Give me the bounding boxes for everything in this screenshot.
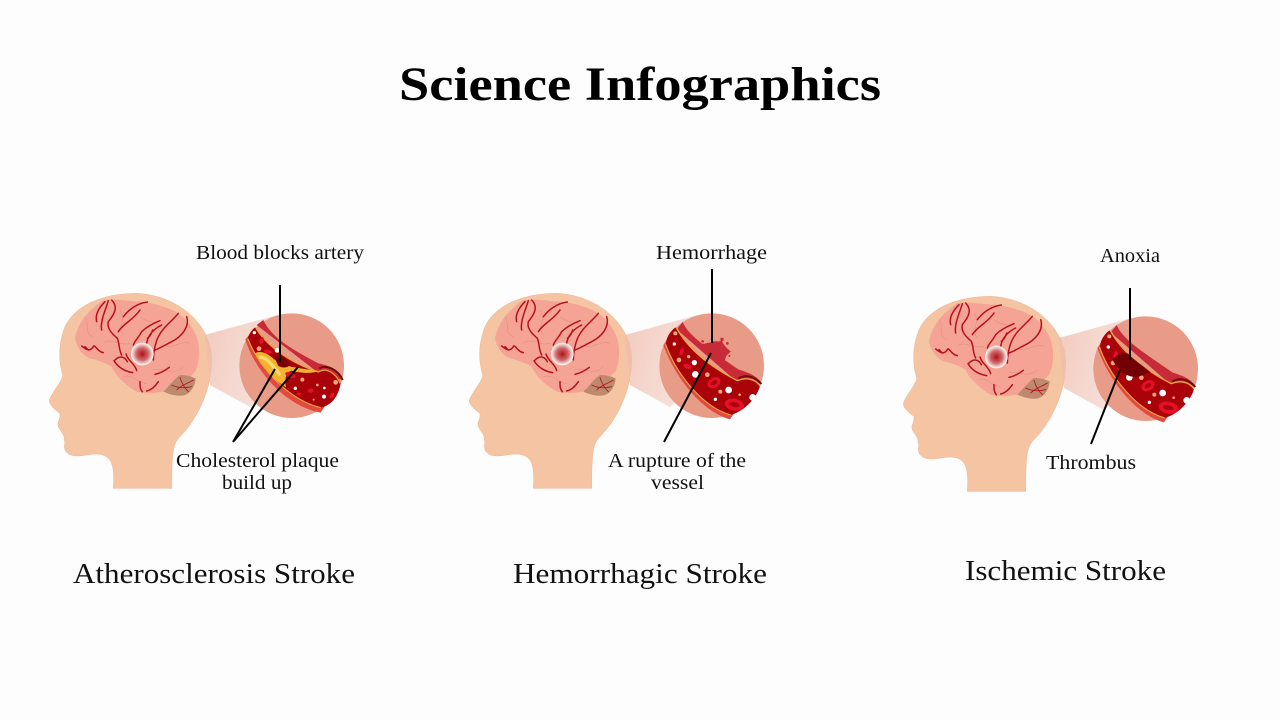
label: a rupture of the vessel: vessel (651, 472, 704, 494)
magnified circle (239, 313, 344, 418)
icon: ruptured vessel (663, 322, 761, 419)
icon: artery with plaque (245, 320, 343, 413)
title: Science Infographics (399, 58, 881, 111)
heading: ischemic stroke: Ischemic Stroke (965, 555, 1166, 587)
panel: atherosclerosis stroke (49, 242, 364, 590)
heading: hemorrhagic stroke: Hemorrhagic Stroke (513, 558, 767, 590)
magnified circle (1093, 316, 1198, 421)
label: cholesterol plaque build up: build up (222, 472, 292, 494)
panel: hemorrhagic stroke (469, 242, 767, 590)
callout line: anoxia (1129, 288, 1131, 360)
callout line: blood blocks artery (279, 285, 281, 362)
callout line: rupture (664, 353, 711, 442)
callout lines: cholesterol plaque (233, 367, 298, 442)
label: anoxia: Anoxia (1100, 245, 1160, 267)
label: thrombus: Thrombus (1046, 452, 1136, 474)
icon: head with brain (903, 296, 1066, 491)
icon: head with brain (469, 293, 632, 488)
magnification beam (625, 315, 712, 407)
callout line: hemorrhage (711, 269, 713, 343)
heading: atherosclerosis stroke: Atherosclerosis Stroke (73, 558, 355, 590)
label: blood blocks artery: Blood blocks artery (196, 242, 364, 264)
label: cholesterol plaque build up: Cholesterol plaque (176, 450, 339, 472)
label: a rupture of the vessel: A rupture of the (608, 450, 746, 472)
callout line: thrombus (1091, 370, 1120, 444)
icon: vessel with thrombus (1097, 325, 1195, 422)
label: hemorrhage: Hemorrhage (656, 242, 767, 264)
magnification beam (205, 315, 292, 407)
magnified circle (659, 313, 764, 418)
magnification beam (1059, 318, 1146, 410)
panel: ischemic stroke (903, 245, 1198, 587)
icon: head with brain (49, 293, 212, 488)
